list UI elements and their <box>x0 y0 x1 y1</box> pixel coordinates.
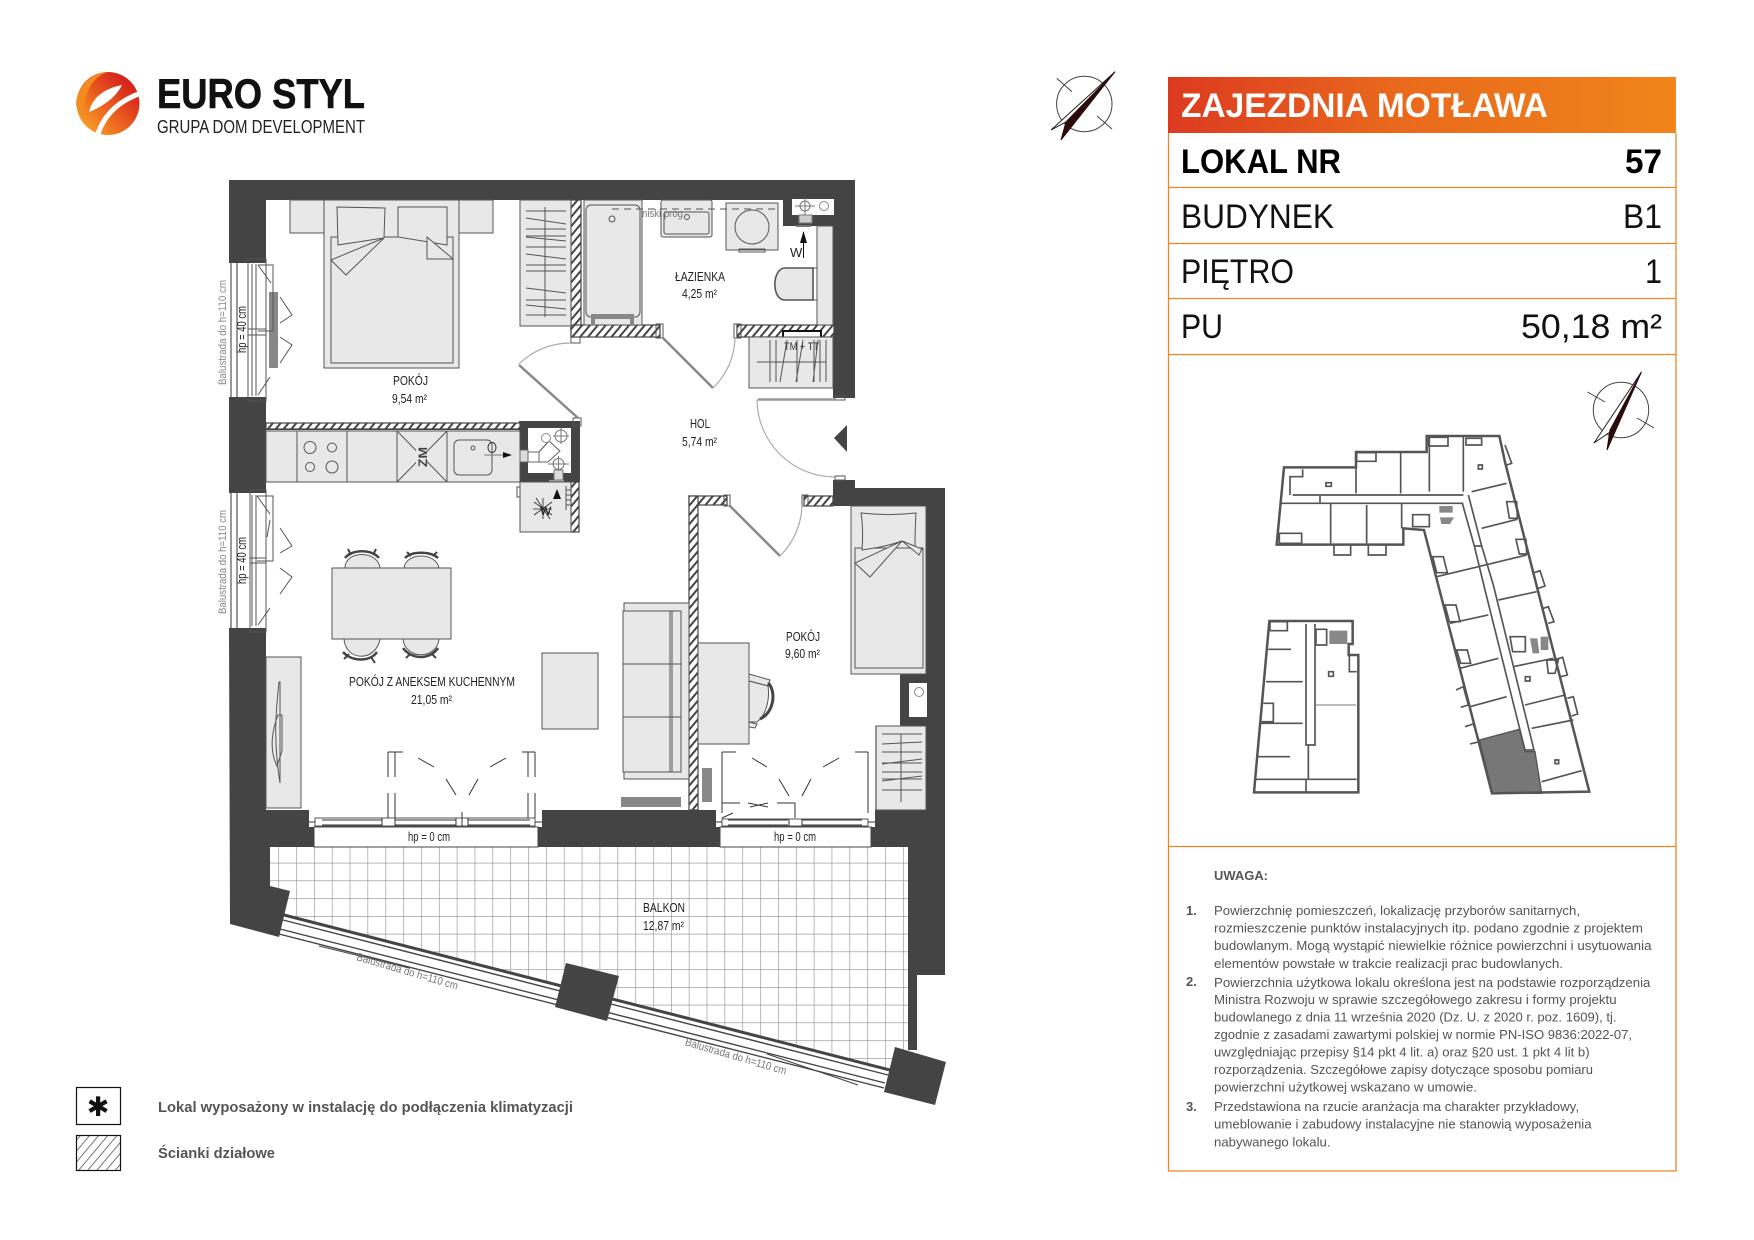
installation shaft bathroom <box>795 198 828 258</box>
note 1 <box>1186 903 1652 971</box>
note 2: Ministra Rozwoju w sprawie szczegółowego zakresu i formy projektu <box>1214 992 1617 1007</box>
panel rows dividers <box>1168 188 1676 846</box>
legend: air conditioning symbol <box>76 1088 120 1124</box>
icon: compass small <box>1588 372 1654 450</box>
row: lokal: LOKAL NR <box>1181 143 1341 181</box>
row: budynek: BUDYNEK <box>1181 198 1334 236</box>
panel: apartment details <box>1168 77 1676 1171</box>
furniture: sofa <box>623 603 689 779</box>
kitchen installation shaft <box>520 428 569 483</box>
label: TM + TT: TM + TT <box>784 341 819 353</box>
label: balcony balustrade two: Balustrada do h=110 cm <box>684 1036 788 1078</box>
fridge label ZM: ZM <box>416 447 430 467</box>
heading: ZAJEZDNIA MOTŁAWA <box>1181 87 1548 125</box>
label: bathroom: ŁAZIENKA <box>675 270 726 284</box>
kitchen vent box <box>517 482 571 532</box>
kitchen counter <box>266 431 520 482</box>
note 2: 2. <box>1186 974 1197 989</box>
label: bedroom two <box>785 629 820 661</box>
window: bedroom west <box>231 259 292 401</box>
label: hp 0 bedroom: hp = 0 cm <box>774 830 816 844</box>
note 2: powierzchni użytkowej wskazano w umowie. <box>1214 1080 1477 1094</box>
furniture: washbasin <box>661 200 712 237</box>
key plan <box>1254 436 1589 793</box>
note 2: budowlanego z dnia 11 września 2020 (Dz. U. z 2020 r. poz. 1609), tj. <box>1214 1010 1617 1024</box>
note 1: budowlanym. Mogą wystąpić niewielkie różnice powierzchni i usytuowania <box>1214 938 1652 953</box>
label: bedroom two: POKÓJ <box>786 629 820 644</box>
note 2: zgodnie z zasadami zawartymi polskiej w normie PN-ISO 9836:2022-07, <box>1214 1027 1632 1042</box>
row: pu <box>1181 308 1662 346</box>
window: living room south <box>309 752 542 847</box>
logo tagline: GRUPA DOM DEVELOPMENT <box>157 117 365 137</box>
partition walls hatched <box>266 200 834 810</box>
floor plan <box>217 180 946 1105</box>
furniture: bathtub <box>584 200 642 325</box>
door: to bathroom <box>656 324 741 388</box>
furniture: double bed <box>290 200 493 368</box>
note 3: 3. <box>1186 1099 1197 1114</box>
label: balcony <box>643 901 685 933</box>
legend: air conditioning text: Lokal wyposażony w instalację do podłączenia klimatyzacji <box>158 1100 573 1116</box>
note 1: 1. <box>1186 903 1197 918</box>
legend: air conditioning symbol: ✱ <box>87 1092 109 1123</box>
row: pietro: PIĘTRO <box>1181 253 1294 291</box>
note 2: Powierzchnia użytkowa lokalu określona jest na podstawie rozporządzenia <box>1214 975 1651 990</box>
furniture: TV cabinet <box>266 657 301 808</box>
radiators <box>269 292 712 807</box>
label: living room <box>349 674 515 707</box>
note 3: nabywanego lokalu. <box>1214 1135 1330 1150</box>
label: balcony: 12,87 m² <box>643 919 684 933</box>
label: hall: HOL <box>690 417 710 431</box>
label: living room: POKÓJ Z ANEKSEM KUCHENNYM <box>349 674 515 689</box>
door: to bedroom <box>519 337 581 426</box>
key plan: highlighted apartment <box>1479 729 1542 793</box>
key plan: south building <box>1254 621 1358 792</box>
row: budynek <box>1181 198 1662 236</box>
label: hp 40 living room: hp = 40 cm <box>235 537 249 584</box>
door: entrance <box>757 396 845 480</box>
legend <box>76 1088 573 1170</box>
row: lokal <box>1181 143 1662 181</box>
label: bedroom <box>392 373 428 406</box>
logo wordmark: EURO STYL <box>157 70 365 117</box>
label: bedroom: 9,54 m² <box>392 392 427 406</box>
balcony tiled floor <box>270 847 908 1075</box>
label: hp 40 bedroom: hp = 40 cm <box>235 306 249 353</box>
row: pu: 50,18 m² <box>1521 308 1662 346</box>
note 2: uwzględniając przepisy §14 pkt 4 lit. a) oraz §20 ust. 1 pkt 4 lit b) <box>1214 1044 1590 1060</box>
notes heading: UWAGA: <box>1214 868 1268 883</box>
furniture: hall cupboard <box>749 337 833 388</box>
furniture: dining table and chairs <box>332 549 451 663</box>
row: lokal: 57 <box>1625 143 1662 181</box>
window: bedroom two south <box>716 726 876 847</box>
label: balustrade west two: Balustrada do h=110 cm <box>217 510 229 614</box>
dashed line low threshold <box>612 208 780 210</box>
note 1: rozmieszczenie punktów instalacyjnych itp. podano zgodnie z projektem <box>1214 920 1643 936</box>
balcony railing <box>279 915 890 1088</box>
label: bathroom <box>675 270 726 301</box>
kitchen W label: W <box>540 504 552 518</box>
legend: partition wall symbol <box>76 1136 120 1170</box>
notes <box>1186 868 1652 1150</box>
window: living room west <box>231 490 292 632</box>
furniture: coffee table <box>542 653 598 729</box>
icon: entrance arrow <box>834 425 847 452</box>
row: pietro <box>1181 253 1662 291</box>
icon: compass large <box>1051 72 1115 140</box>
logo: Euro Styl <box>76 70 365 137</box>
row: pietro: 1 <box>1645 253 1662 291</box>
label: bedroom two: 9,60 m² <box>785 647 820 661</box>
label: balustrade west one: Balustrada do h=110 cm <box>217 280 229 385</box>
label: bedroom: POKÓJ <box>393 373 428 388</box>
icon: logo flame <box>76 72 141 137</box>
furniture: wardrobe bedroom two <box>876 726 926 810</box>
note 2: rozporządzenia. Szczegółowe zapisy dotyczące sposobu pomiaru <box>1214 1062 1593 1077</box>
header bar <box>1168 77 1676 133</box>
note 3 <box>1186 1099 1592 1150</box>
row: budynek: B1 <box>1623 198 1662 236</box>
label: hp 0 living room: hp = 0 cm <box>408 830 450 844</box>
label: hall <box>682 417 717 449</box>
key plan: main building <box>1277 436 1589 793</box>
panel frame <box>1168 133 1676 1171</box>
furniture: wardrobe bedroom <box>520 200 571 326</box>
row: pu: PU <box>1181 308 1223 346</box>
legend: partition wall text: Ścianki działowe <box>158 1144 275 1162</box>
label: low threshold: niski próg <box>642 208 683 220</box>
note 3: Przedstawiona na rzucie aranżacja ma charakter przykładowy, <box>1214 1099 1579 1114</box>
door: to bedroom two <box>724 495 808 556</box>
label: balcony: BALKON <box>643 901 685 915</box>
label: balcony balustrade one: Balustrada do h=110 cm <box>355 951 459 993</box>
note 3: umeblowanie i zabudowy instalacyjne nie stanowią wyposażenia <box>1214 1117 1592 1132</box>
label: hall: 5,74 m² <box>682 435 717 449</box>
bathroom W label: W <box>790 245 803 260</box>
note 1: Powierzchnię pomieszczeń, lokalizację przyborów sanitarnych, <box>1214 903 1580 918</box>
furniture: desk with chair <box>698 643 773 744</box>
label: living room: 21,05 m² <box>411 693 452 707</box>
structural walls <box>229 180 946 1105</box>
label: bathroom: 4,25 m² <box>682 287 717 301</box>
note 1: elementów powstałe w trakcie realizacji prac budowlanych. <box>1214 956 1563 971</box>
furniture: toilet <box>775 226 833 325</box>
furniture: single bed <box>851 506 926 674</box>
furniture: washing machine <box>726 203 778 252</box>
note 2 <box>1186 974 1651 1094</box>
